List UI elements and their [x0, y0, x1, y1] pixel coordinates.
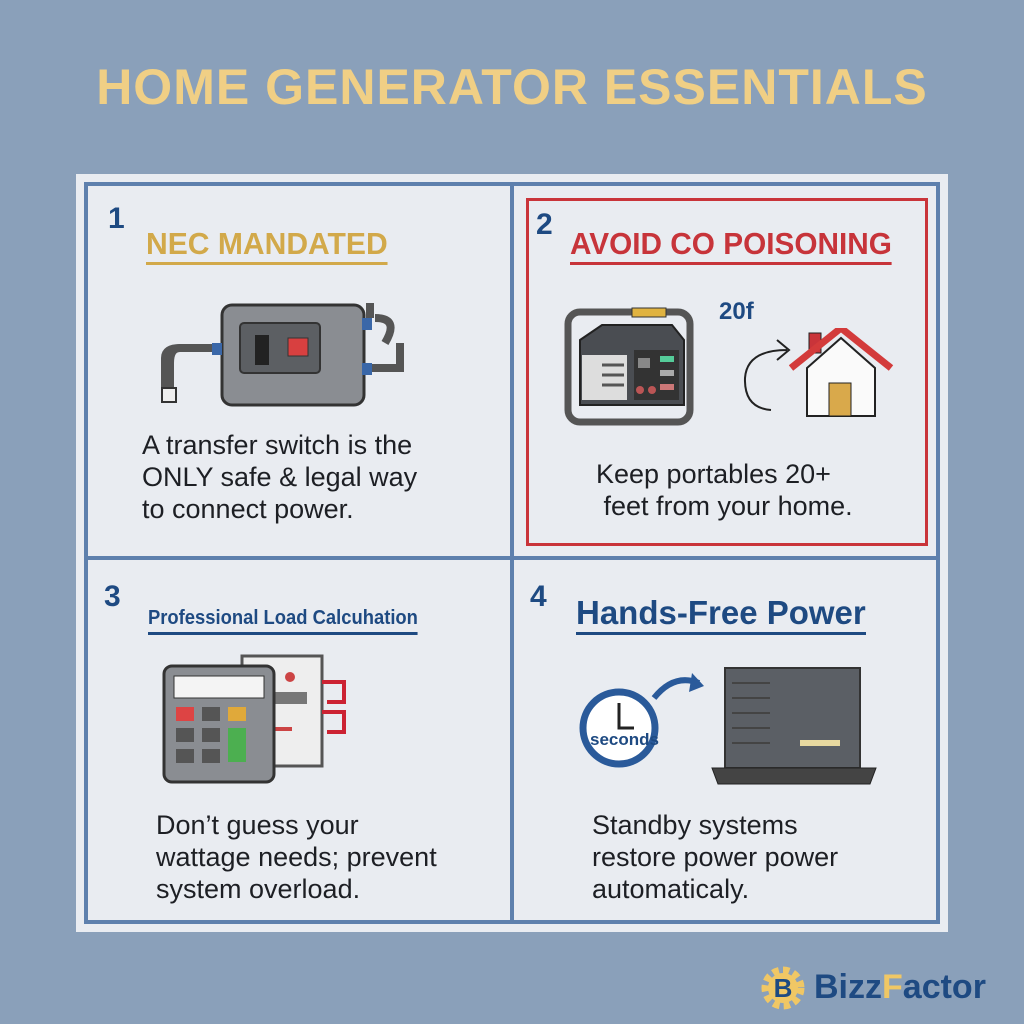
heading 4: Hands-Free Power: [576, 594, 866, 631]
text 4: restore power power: [592, 842, 838, 872]
number 1: 1: [108, 202, 125, 235]
brand text: BizzFactor: [814, 968, 986, 1006]
text 3: [156, 810, 437, 904]
text 4: [592, 810, 838, 904]
label 20f: 20f: [719, 298, 754, 325]
title: HOME GENERATOR ESSENTIALS: [96, 59, 928, 115]
text 1: A transfer switch is the: [142, 430, 412, 460]
icon: transfer switch: [161, 303, 404, 406]
label seconds: seconds: [590, 730, 659, 749]
text 1: ONLY safe & legal way: [142, 462, 417, 492]
icon: calculator panel: [162, 654, 346, 784]
number 3: 3: [104, 580, 121, 613]
heading 2: AVOID CO POISONING: [570, 226, 892, 261]
icon: gear: B: [774, 973, 792, 1003]
heading 1: NEC MANDATED: [146, 226, 388, 261]
text 2: feet from your home.: [604, 491, 853, 521]
number 4: 4: [530, 580, 547, 613]
arrow: [744, 339, 790, 411]
panel: 1 NEC: [108, 202, 417, 524]
text 2: Keep portables 20+: [596, 459, 831, 489]
card: [76, 174, 948, 932]
panel: 2 CO: [526, 198, 928, 546]
logo: [762, 966, 986, 1010]
text 3: Don’t guess your: [156, 810, 359, 840]
text 2: [596, 459, 853, 521]
text 3: wattage needs; prevent: [156, 842, 437, 872]
icon: house: [789, 328, 894, 417]
icon: standby generator: [711, 667, 877, 784]
text 1: to connect power.: [142, 494, 354, 524]
panel: 3 load: [104, 580, 437, 904]
icon: gear: [762, 966, 804, 1010]
text 1: [142, 430, 417, 524]
number 2: 2: [536, 208, 553, 241]
text 4: automaticaly.: [592, 874, 749, 904]
panel: 4 standby: [530, 580, 877, 904]
icon: clock: [580, 673, 704, 768]
text 3: system overload.: [156, 874, 360, 904]
red frame: [526, 198, 928, 546]
icon: generator: [564, 308, 694, 426]
text 4: Standby systems: [592, 810, 798, 840]
heading 3: Professional Load Calcuhation: [148, 607, 418, 629]
